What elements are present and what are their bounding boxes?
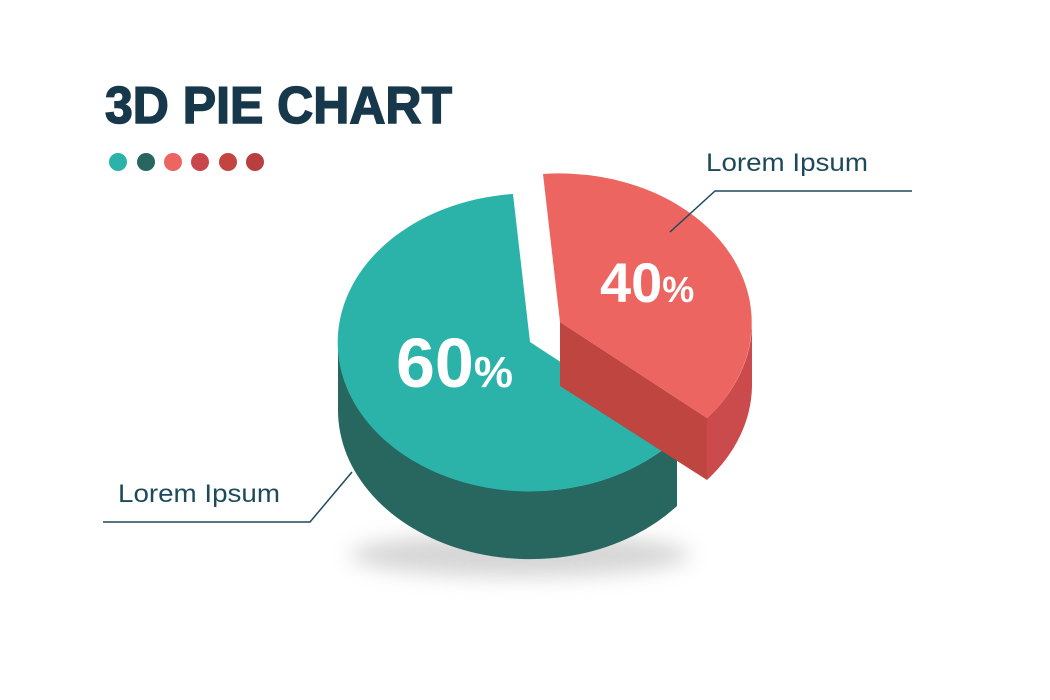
pie slice: 40% red xyxy=(543,173,752,480)
pie slice: 60% teal: 60% xyxy=(396,324,513,402)
pie slice: 40% red: 40% xyxy=(600,251,694,314)
callout: bottom left: Lorem Ipsum xyxy=(118,480,280,508)
callout: top right: Lorem Ipsum xyxy=(706,149,868,177)
color dots xyxy=(109,153,264,171)
shadow xyxy=(350,533,690,577)
pie slice: 60% teal xyxy=(338,194,677,559)
title: 3D PIE CHART xyxy=(105,77,452,135)
callout: top right xyxy=(670,149,912,232)
callout: bottom left xyxy=(103,472,352,522)
